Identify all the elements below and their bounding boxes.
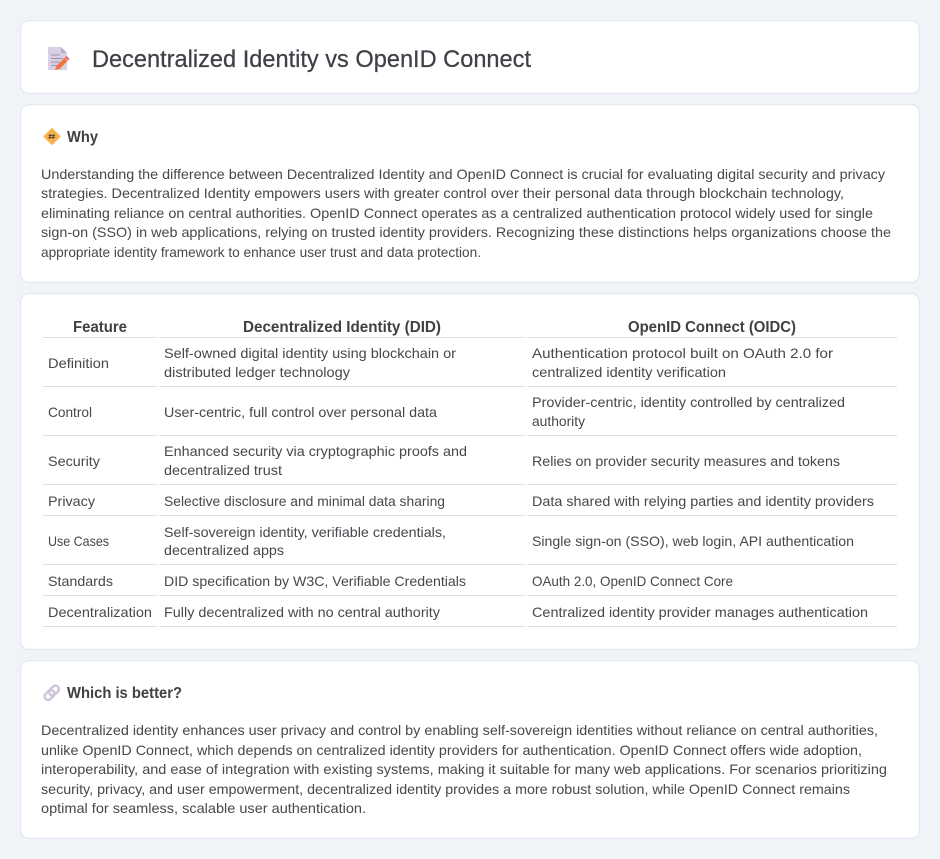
heading: why: Why [67,129,98,146]
row: security: Relies on provider security measures and tokens [532,453,840,469]
row: control: User-centric, full control over personal data [164,404,437,420]
panel: header [21,21,919,93]
row: security: decentralized trust [164,462,282,478]
row: use cases: Single sign-on (SSO), web login, API authentication [532,533,854,549]
text block: why [41,166,891,260]
row: decentralization [48,604,868,620]
row: privacy: Selective disclosure and minimal data sharing [164,493,445,509]
row: decentralization: Fully decentralized with no central authority [164,604,440,620]
row: definition: Authentication protocol built on OAuth 2.0 for [532,345,833,361]
icon: link [43,684,60,701]
row: standards: OAuth 2.0, OpenID Connect Core [532,573,733,589]
row: definition: Self-owned digital identity using blockchain or [164,345,456,361]
row: decentralization: Centralized identity provider manages authentication [532,604,868,620]
row: standards: DID specification by W3C, Verifiable Credentials [164,573,466,589]
title: Decentralized Identity vs OpenID Connect [92,46,531,73]
row: definition: centralized identity verification [532,364,726,380]
table header: OpenID Connect (OIDC) [628,319,796,336]
row: control [48,394,845,429]
text block: which is better: unlike OpenID Connect, which depends on centralized identity providers for authentication. OpenID Connect offers wide adoption, [41,742,862,758]
text block: which is better: optimal for seamless, scalable user authentication. [41,800,366,816]
row: security [48,443,840,478]
row: use cases: Use Cases [48,533,109,549]
row: security: Enhanced security via cryptographic proofs and [164,443,467,459]
text block: why: Understanding the difference between Decentralized Identity and OpenID Connect is crucial for evaluating digital security and privacy [41,166,885,182]
text block: which is better: interoperability, and ease of integration with existing systems, making it suitable for many web applications. For scenarios prioritizing [41,761,887,777]
row: standards [48,573,733,589]
table header: Feature [73,319,127,336]
row: security: Security [48,453,100,469]
heading: which is better: Which is better? [67,685,182,702]
panel: which is better [21,661,919,838]
row: privacy: Data shared with relying parties and identity providers [532,493,874,509]
panel: why [21,105,919,282]
row: definition: distributed ledger technology [164,364,350,380]
row: decentralization: Decentralization [48,604,152,620]
text block: why: sign-on (SSO) in web applications, relying on trusted identity providers. Recognizing these distinctions helps organizations choose the [41,224,891,240]
table header [73,319,796,336]
table header: Decentralized Identity (DID) [243,319,441,336]
row: control: Control [48,404,92,420]
panel: comparison table [21,294,919,649]
row: control: Provider-centric, identity controlled by centralized [532,394,845,410]
text block: which is better: Decentralized identity enhances user privacy and control by enabling self-sovereign identities without reliance on central authorities, [41,722,878,738]
row: control: authority [532,413,585,429]
text block: why: appropriate identity framework to enhance user trust and data protection. [41,244,481,260]
row: privacy: Privacy [48,493,95,509]
row: standards: Standards [48,573,113,589]
row: use cases: decentralized apps [164,542,284,558]
row: use cases: Self-sovereign identity, verifiable credentials, [164,524,446,540]
icon: warning diamond [44,128,60,144]
row: use cases [48,524,854,558]
icon: memo with pencil [48,47,70,70]
row: definition [48,345,833,380]
text block: why: strategies. Decentralized Identity empowers users with greater control over their personal data through blockchain technology, [41,185,844,201]
text block: which is better: security, privacy, and user empowerment, decentralized identity provides a more robust solution, while OpenID Connect remains [41,781,850,797]
text block: why: eliminating reliance on central authorities. OpenID Connect operates as a centralized authentication protocol widely used for single [41,205,873,221]
row: definition: Definition [48,355,109,371]
text block: which is better [41,722,887,816]
row: privacy [48,493,874,509]
